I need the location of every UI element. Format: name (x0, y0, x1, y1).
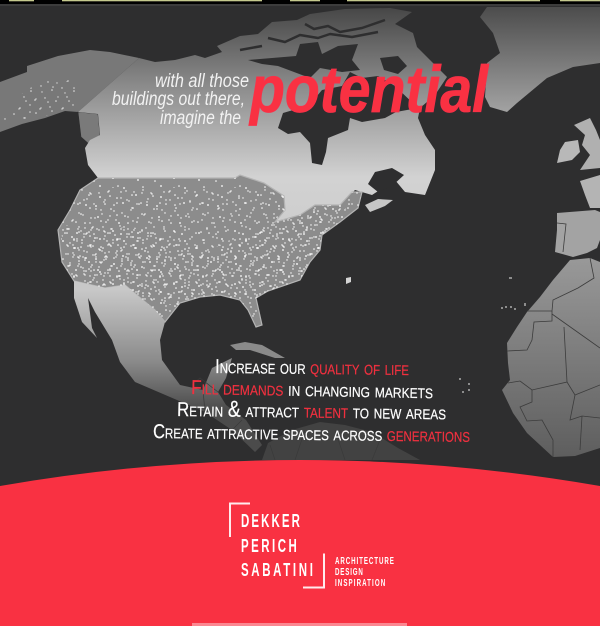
tagline: with all those buildings out there, imagine the: imagine the (160, 107, 241, 129)
logo descriptor: INSPIRATION (335, 576, 385, 588)
map: Alaska (0, 50, 139, 132)
logo name (241, 511, 313, 581)
logo name: DEKKER (241, 511, 300, 532)
logo name: SABATINI (241, 560, 313, 581)
tagline: with all those buildings out there, imagine the: with all those (155, 70, 249, 92)
benefit line 1: Increase our quality of life (215, 356, 409, 380)
map: Mexico and Central America (74, 281, 262, 452)
map: Arctic channels (248, 42, 360, 78)
map: Great Britain (574, 118, 600, 170)
map: Ireland (557, 140, 580, 163)
map: country borders (507, 223, 600, 457)
logo bracket: bottom right (303, 554, 324, 588)
logo descriptor: DESIGN (335, 565, 363, 577)
footer strip (192, 623, 407, 626)
red footer panel (0, 460, 600, 626)
map: Africa (502, 258, 600, 457)
map: Greenland (480, 7, 600, 112)
map: Alaska peninsula (78, 112, 100, 145)
tagline: with all those buildings out there, imagine the (112, 70, 249, 129)
logo: Dekker Perich Sabatini (230, 504, 394, 588)
benefit line 2: Fill demands in changing markets (191, 377, 433, 403)
map: Mexico borders (192, 378, 380, 460)
map: Newfoundland (365, 199, 393, 212)
map: France (580, 175, 600, 208)
map: Iberia (555, 210, 600, 257)
benefits list (153, 356, 470, 447)
map: Canada and Arctic islands (78, 8, 447, 222)
map: Foxe Basin (380, 56, 407, 74)
map: South America (262, 422, 420, 460)
map: United States (58, 175, 362, 327)
US building dots (60, 178, 361, 317)
logo descriptor (335, 554, 394, 588)
benefit line 4: Create attractive spaces across generations (153, 421, 470, 447)
logo name: PERICH (241, 536, 297, 557)
map: Arctic thin channels (240, 20, 385, 50)
top strip (0, 0, 600, 6)
logo bracket: top left (230, 504, 250, 537)
map: Hudson Bay (278, 72, 418, 165)
map: Cuba (230, 342, 285, 358)
tagline: with all those buildings out there, imagine the: buildings out there, (112, 88, 245, 110)
heading: potential: potential (248, 52, 489, 126)
Alaska building dots (4, 80, 75, 120)
benefit line 3: Retain & attract talent to new areas (177, 395, 446, 424)
map: Gulf of St Lawrence (368, 168, 404, 192)
map: small Atlantic islands (346, 277, 526, 393)
logo descriptor: ARCHITECTURE (335, 554, 394, 566)
map: world land masses (0, 7, 600, 460)
